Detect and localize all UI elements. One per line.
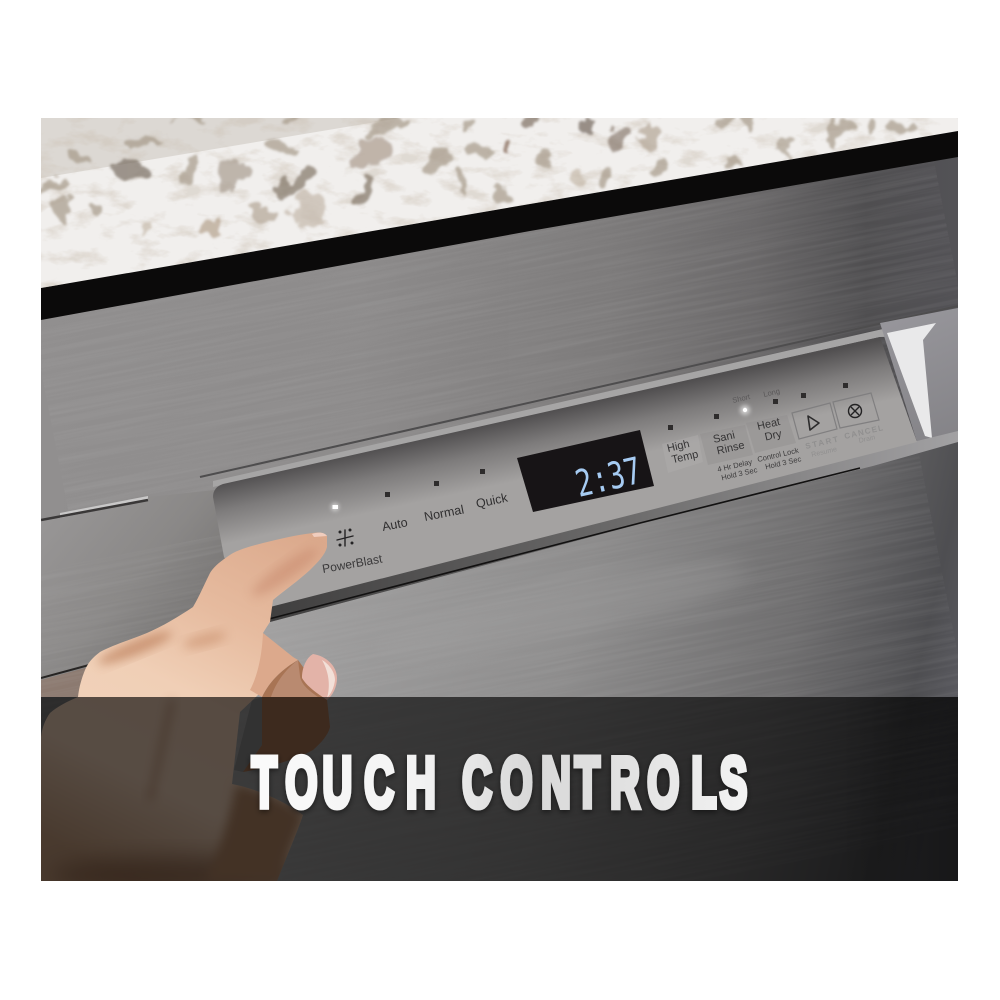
granite mineral flecks [40,113,918,244]
title word: CONTROLS: CONTROLS [462,743,747,823]
thumbnail white tip [322,660,335,698]
panel shaded button: Heat Dry [748,421,796,453]
icon: PowerBlast spray [337,529,353,546]
title word: TOUCH: TOUCH [252,743,436,823]
middle finger behind thumb [250,633,298,697]
label: Heat Dry: Heat [756,416,781,433]
back of hand shadow [50,857,310,893]
granite noise veining [41,118,958,288]
label: Normal: Normal [423,503,465,524]
label: CANCEL Drain: Drain [858,434,876,445]
label: START Resume: Resume [811,446,838,459]
panel shaded button: High Temp [694,436,695,437]
label: Sani Rinse: Rinse [716,439,746,457]
label: High Temp: High [666,438,691,455]
knuckle shading [95,627,175,669]
photo: dishwasher control panel beneath a granite countertop [41,118,958,881]
thumbnail [302,654,337,700]
left door lower seam [41,664,88,679]
label: Sani Rinse: Sani [712,429,736,446]
second knuckle shading [182,629,228,651]
indicator lights [385,383,848,497]
label: High Temp: Temp [671,448,700,466]
left handle highlight [60,496,148,518]
brushed metal texture [698,175,958,400]
lit light: PowerBlast [331,503,339,511]
button outline: cancel [833,393,879,428]
label: START Resume: START [804,434,841,451]
door crease line above the panel [200,306,958,477]
digital display [517,430,654,512]
trim under panel [270,431,958,622]
thumb [243,533,337,772]
infographic: dishwasher touch controls [41,118,958,881]
title: TOUCH CONTROLS [252,743,747,823]
thumb skin side above nail [271,660,318,697]
label: 4 Hr Delay Hold 3 Sec: Hold 3 Sec [720,465,758,482]
brighter reflection on lower steel [626,568,728,604]
base door tone [41,550,542,736]
lower left door lip [41,668,86,697]
lower hand below the thumb [205,785,303,881]
right end of lip [880,308,958,442]
icon: cancel circle [848,404,862,418]
label: Quick: Quick [475,490,510,511]
label: Short: Short [731,392,752,405]
lit light: Short [740,405,750,415]
upper stainless steel door band [41,150,958,550]
darker right end of caption band [840,697,958,881]
hand pressing the PowerBlast button [41,532,327,893]
label: CANCEL Drain: CANCEL [843,423,885,441]
countertop upper surface [41,118,400,178]
finger shading [248,543,322,601]
light lip above the control panel [213,329,884,487]
panel shaded button: Sani Rinse [702,430,752,464]
display time: 2:37 [571,449,645,506]
label: Heat Dry: Dry [764,428,783,443]
dark caption band [41,697,958,881]
control panel [213,337,917,607]
label: PowerBlast: PowerBlast [321,552,384,576]
fingernail tip [312,533,327,537]
crease between fingers [150,700,172,800]
label: Control Lock Hold 3 Sec: Hold 3 Sec [764,454,802,471]
black gap under countertop [41,125,958,320]
lower stainless steel door [85,418,958,881]
label: Auto: Auto [381,515,409,534]
label: Long: Long [762,386,781,399]
granite countertop [40,113,958,288]
label: Control Lock Hold 3 Sec: Control Lock [756,446,800,464]
white side reflection [887,323,936,438]
button outline: start [792,403,837,439]
left handle crease [41,500,148,520]
left door section below handle [41,490,222,680]
grey wedge between thumb and hand [234,697,264,772]
icon: start triangle [808,416,819,430]
black seam under panel [265,468,860,620]
label: 4 Hr Delay Hold 3 Sec: 4 Hr Delay [716,457,753,474]
